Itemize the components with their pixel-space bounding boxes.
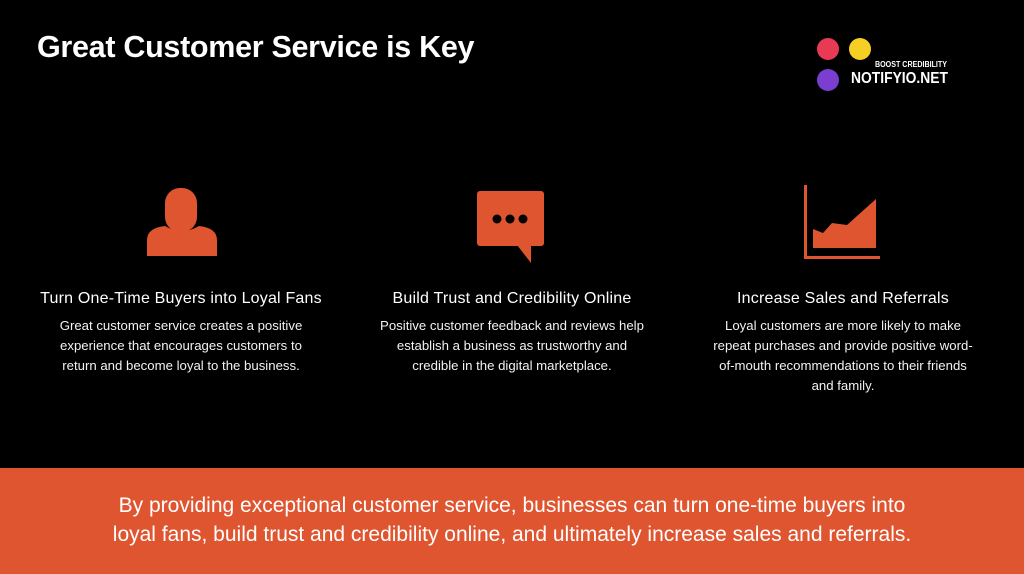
icon: person [147,188,217,256]
panel: trust: Build Trust and Credibility Online [393,290,631,307]
panel: trust: Positive customer feedback and reviews help establish a business as trustworthy and credible in the digital marketplace. [380,318,644,373]
logo: BOOST CREDIBILITY [875,60,948,69]
icon: speech bubble [477,191,544,263]
icon: chart [804,185,880,259]
panel: trust [380,290,644,373]
panel: loyal fans [40,290,322,373]
panel: sales: Increase Sales and Referrals [737,290,949,307]
footer banner: By providing exceptional customer service, businesses can turn one-time buyers into [119,494,905,517]
footer banner [0,468,1024,574]
panel: loyal fans: Great customer service creates a positive experience that encourages customers to return and become loyal to the business. [60,318,302,373]
footer banner: loyal fans, build trust and credibility online, and ultimately increase sales and referrals. [113,523,911,546]
title: Great Customer Service is Key [37,30,474,64]
panel: sales: Loyal customers are more likely to make repeat purchases and provide positive word-of-mouth recommendations to their friends and family. [713,318,973,393]
panel: loyal fans: Turn One-Time Buyers into Loyal Fans [40,290,322,307]
logo [817,38,948,91]
